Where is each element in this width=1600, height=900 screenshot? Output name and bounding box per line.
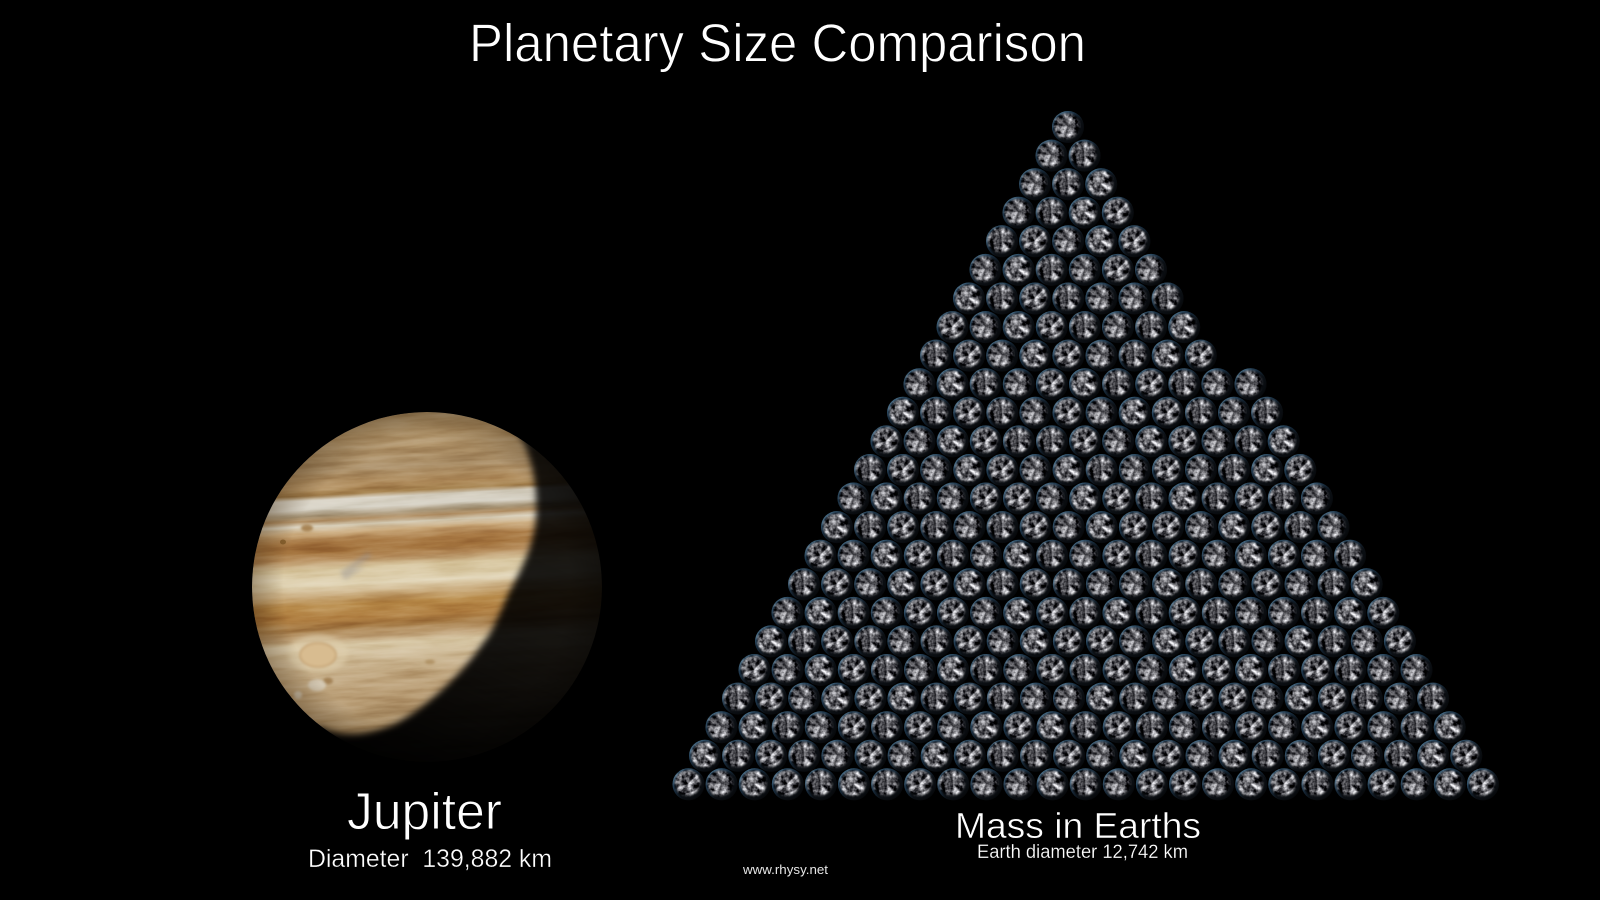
Mass in Earths label: Mass in Earths (955, 805, 1201, 846)
icon: Jupiter planet (252, 412, 602, 740)
Earth diameter: Earth diameter 12,742 km (977, 842, 1188, 863)
Jupiter label: Jupiter (347, 783, 502, 841)
chart: triangle of Earths by mass (672, 111, 1499, 800)
title: Planetary Size Comparison (469, 14, 1086, 74)
Jupiter diameter: Diameter 139,882 km (308, 845, 552, 873)
website credit: www.rhysy.net (742, 862, 828, 877)
Great Red Spot (288, 635, 348, 673)
